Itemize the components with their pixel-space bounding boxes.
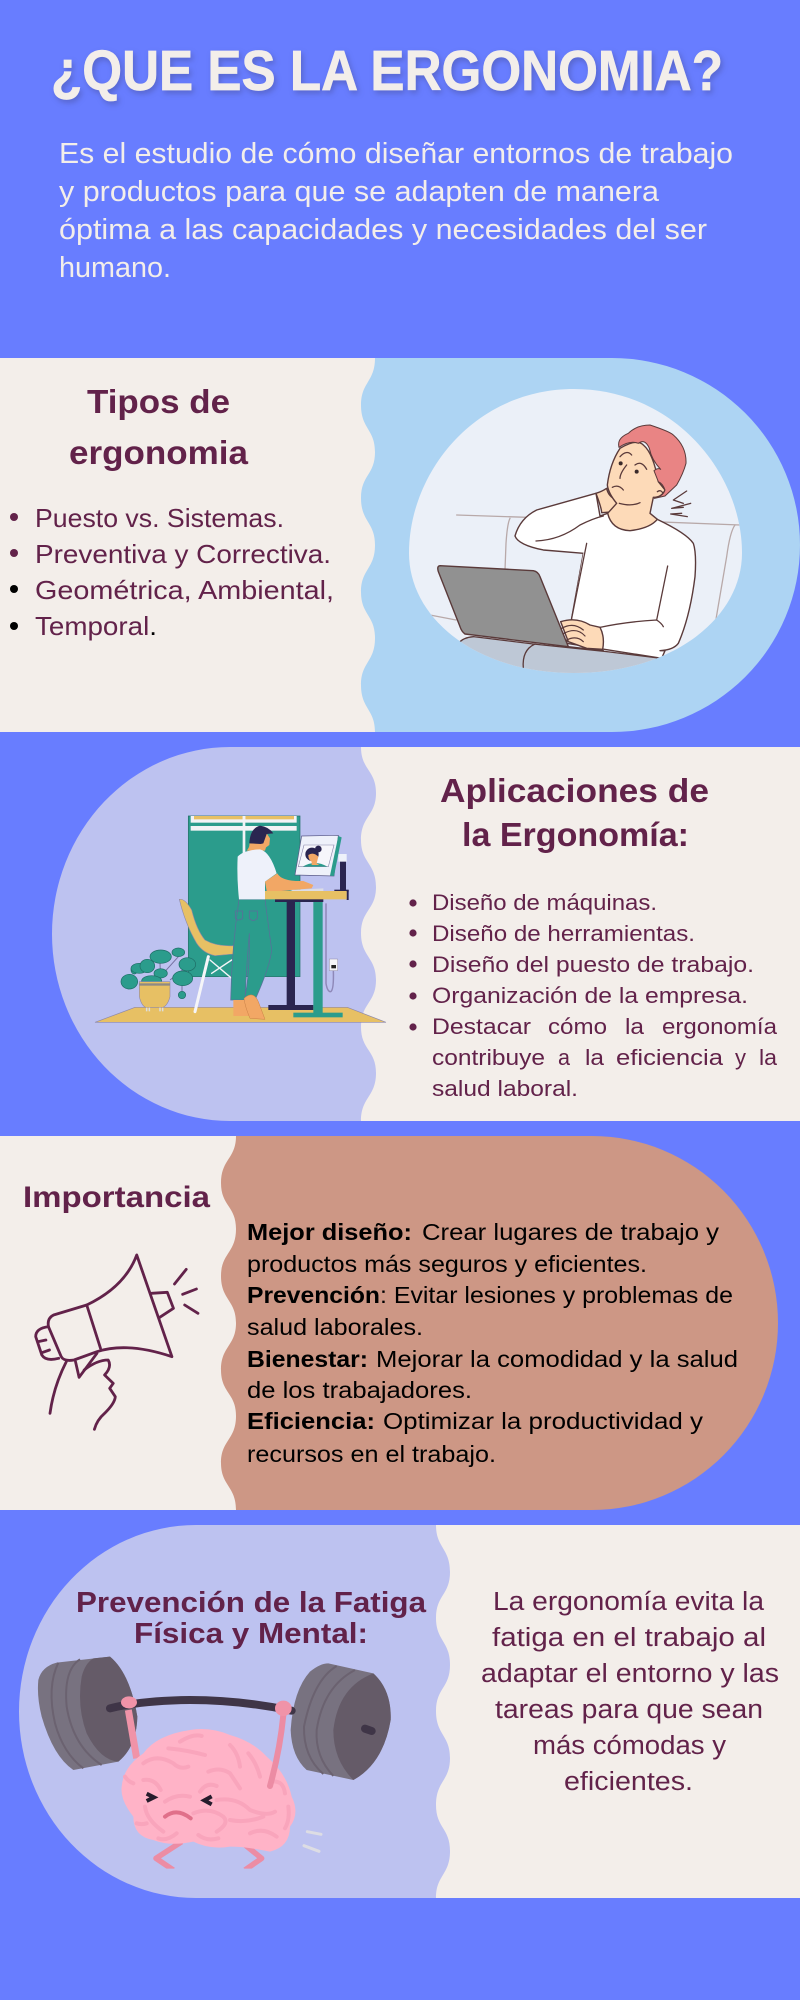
title: ¿QUE ES LA ERGONOMIA?: [51, 39, 723, 103]
heading: tipos de ergonomia: ergonomia: [69, 434, 249, 471]
list: tipos: [10, 503, 334, 641]
illustration: brain lifting barbell: [38, 1657, 391, 1870]
intro paragraph: [59, 138, 733, 284]
heading: aplicaciones de la ergonomia: Aplicaciones de: [440, 772, 709, 809]
text block: fatiga: [481, 1588, 779, 1796]
text block: importancia: [247, 1219, 738, 1467]
panel: tipos de ergonomia: [0, 358, 800, 732]
list: aplicaciones: ergonomía: [662, 1014, 778, 1039]
list: tipos: Geométrica, Ambiental,: [35, 575, 334, 605]
text block: importancia: Prevención: [247, 1282, 380, 1308]
text block: fatiga: La ergonomía evita la: [493, 1588, 765, 1616]
text block: fatiga: tareas para que sean: [495, 1696, 763, 1724]
panel background beige: [0, 1136, 240, 1510]
text block: importancia: Eficiencia:: [247, 1408, 375, 1434]
intro paragraph: Es el estudio de cómo diseñar entornos de trabajo: [59, 138, 733, 170]
text block: importancia: productos más seguros y eficientes.: [247, 1251, 647, 1277]
heading: importancia: Importancia: [23, 1181, 210, 1214]
list: aplicaciones: Diseño de máquinas.: [432, 890, 657, 915]
panel lavender wavy shape: [52, 747, 376, 1121]
list: aplicaciones: Organización de la empresa.: [432, 983, 748, 1008]
list: aplicaciones: [409, 890, 778, 1101]
text block: importancia: de los trabajadores.: [247, 1377, 472, 1403]
text block: importancia: Optimizar la productividad y: [383, 1408, 703, 1434]
illustration: person at standing desk: [95, 816, 386, 1022]
text block: fatiga: fatiga en el trabajo al: [492, 1624, 766, 1652]
list: aplicaciones: a: [558, 1045, 570, 1070]
heading: prevencion de la fatiga: [76, 1587, 427, 1650]
heading: tipos de ergonomia: Tipos de: [87, 383, 230, 420]
panel: importancia: [0, 1136, 778, 1510]
intro paragraph: óptima a las capacidades y necesidades del ser: [59, 214, 707, 246]
panel background beige: [430, 1525, 800, 1898]
list: aplicaciones: Destacar: [432, 1014, 532, 1039]
panel background beige: [355, 747, 800, 1121]
list: aplicaciones: Diseño del puesto de trabajo.: [432, 952, 754, 977]
panel background beige: [0, 358, 385, 732]
list: tipos: Temporal .: [35, 611, 157, 641]
list: aplicaciones: cómo: [548, 1014, 607, 1039]
panel: prevencion de la fatiga: [19, 1525, 800, 1898]
text block: importancia: recursos en el trabajo.: [247, 1441, 496, 1467]
heading: aplicaciones de la ergonomia: [440, 772, 709, 853]
list: aplicaciones: contribuye: [432, 1045, 545, 1070]
text block: importancia: salud laborales.: [247, 1314, 423, 1340]
list: tipos: Preventiva y Correctiva.: [35, 539, 331, 569]
heading: aplicaciones de la ergonomia: la Ergonomía:: [462, 816, 689, 853]
list: aplicaciones: eficiencia: [616, 1045, 724, 1070]
panel blue wavy shape: [361, 358, 800, 732]
list: aplicaciones: Diseño de herramientas.: [432, 921, 695, 946]
icon: megaphone in hand: [36, 1255, 198, 1429]
list: tipos: Puesto vs. Sistemas.: [35, 503, 284, 533]
text block: fatiga: eficientes.: [564, 1768, 693, 1796]
panel: aplicaciones: [52, 747, 800, 1121]
text block: fatiga: adaptar el entorno y las: [481, 1660, 779, 1688]
intro paragraph: y productos para que se adapten de manera: [59, 176, 660, 208]
list: aplicaciones: la: [625, 1014, 645, 1039]
text block: importancia: Bienestar:: [247, 1346, 368, 1372]
list: aplicaciones: la: [759, 1045, 777, 1070]
text block: importancia: Crear lugares de trabajo y: [422, 1219, 719, 1245]
list: aplicaciones: y: [735, 1045, 747, 1070]
list: aplicaciones: la: [585, 1045, 605, 1070]
illustration: man with neck pain at laptop: [409, 389, 742, 673]
panel lavender wavy shape: [19, 1525, 450, 1898]
text block: fatiga: más cómodas y: [533, 1732, 726, 1760]
text block: importancia: Mejor diseño:: [247, 1219, 412, 1245]
text block: importancia: Mejorar la comodidad y la salud: [376, 1346, 738, 1372]
panel brown wavy shape: [221, 1136, 778, 1510]
text block: importancia: : Evitar lesiones y problemas de: [380, 1282, 733, 1308]
heading: tipos de ergonomia: [69, 383, 249, 471]
heading: prevencion de la fatiga: Prevención de la Fatiga: [76, 1587, 427, 1619]
list: aplicaciones: salud laboral.: [432, 1076, 578, 1101]
heading: prevencion de la fatiga: Física y Mental:: [134, 1618, 368, 1650]
intro paragraph: humano.: [59, 252, 171, 284]
